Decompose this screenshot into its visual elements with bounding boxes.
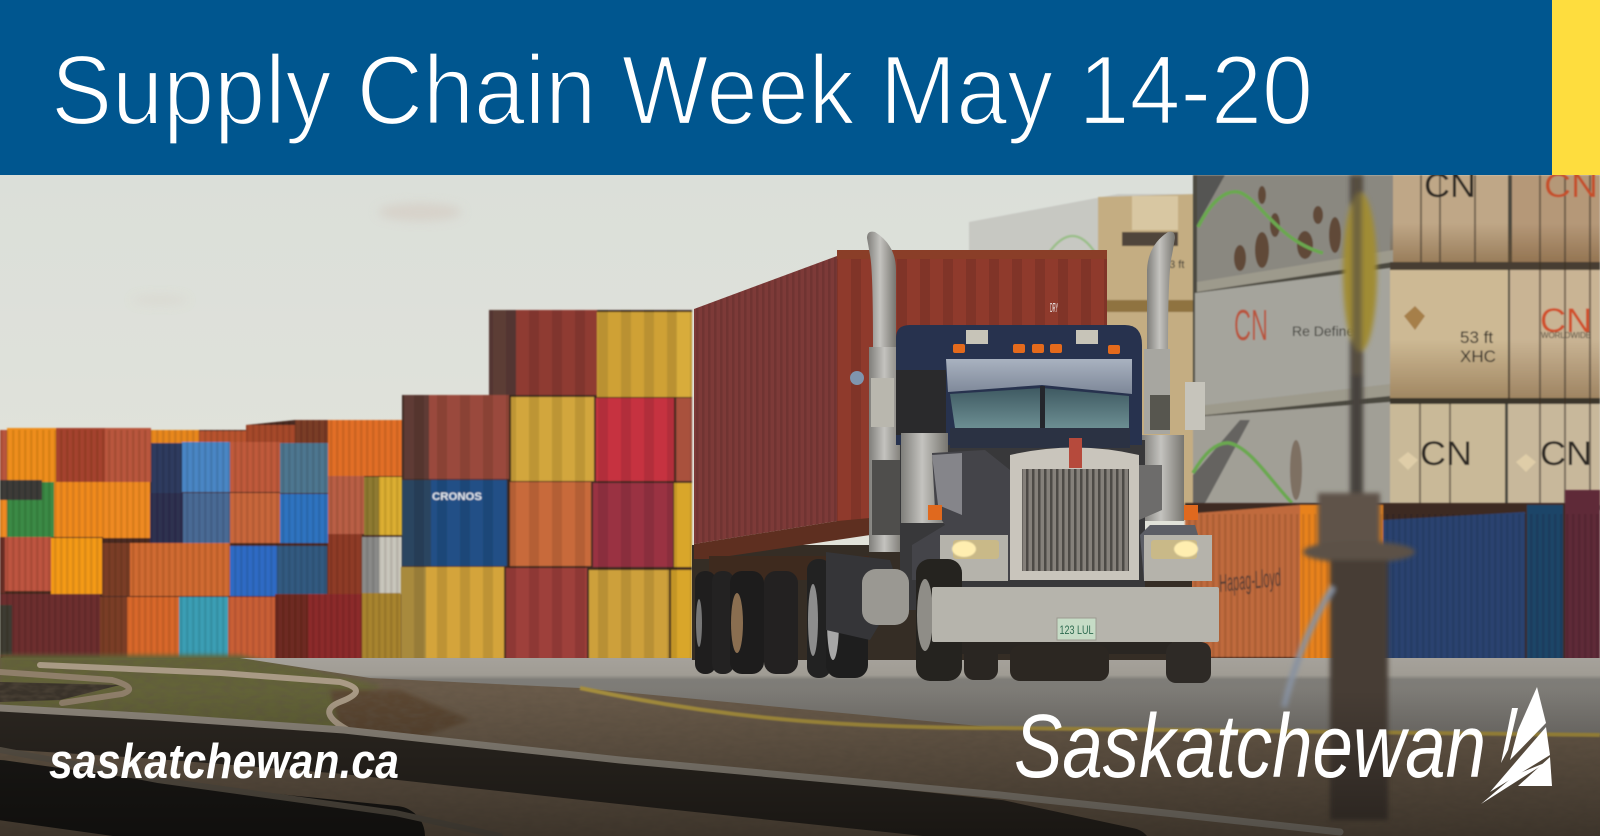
container stacks: right with CN branding: CN (1420, 435, 1472, 473)
cab (850, 325, 1205, 610)
front bumper (932, 587, 1219, 642)
headlights (940, 535, 1212, 581)
website url: saskatchewan.ca (49, 735, 399, 789)
blurred clouds (132, 203, 462, 305)
header band (0, 0, 1552, 175)
container stacks: centre (401, 310, 692, 662)
Saskatchewan wordmark: Saskatchewan (1014, 697, 1486, 797)
container stacks: behind truck (969, 194, 1198, 520)
shipping containers: lower right (1185, 490, 1600, 663)
container stacks: right with CN branding: WORLDWIDE (1541, 331, 1591, 340)
foreground pole with blurred sign (1284, 175, 1415, 820)
shipping containers: lower right: Hapag-Lloyd (1218, 564, 1283, 598)
container stacks: centre: CRONOS (432, 491, 482, 503)
trailer and drive wheels (695, 552, 900, 678)
fuel tank (862, 569, 909, 625)
container stacks: right with CN branding: CN (1544, 167, 1598, 205)
container stacks: right with CN branding: CN (1234, 301, 1268, 350)
title: Supply Chain Week May 14-20 (51, 35, 1313, 145)
trailer container (694, 250, 1107, 559)
shadow under truck (692, 545, 1192, 660)
licence plate (1057, 618, 1096, 640)
exhaust stacks (867, 232, 1184, 552)
container stacks: right with CN branding: XHC (1460, 347, 1496, 366)
container stacks: left (0, 420, 404, 662)
front tyres (916, 559, 1211, 683)
railway track (0, 665, 1340, 836)
licence plate: 123 LUL (1060, 623, 1094, 637)
icon: Saskatchewan wheat logo (1481, 687, 1552, 804)
container stacks: behind truck: 53 ft (1163, 259, 1184, 271)
ground: dirt, grass and road (0, 655, 1600, 836)
bottom photo shading (0, 690, 1600, 836)
yellow accent block (1552, 0, 1600, 175)
hood, grille and fenders (901, 433, 1212, 581)
truck with container trailer (692, 232, 1219, 683)
container stacks: right with CN branding (1193, 167, 1600, 510)
container stacks: right with CN branding: 53 ft (1460, 328, 1493, 347)
container stacks: right with CN branding: Re Defined (1292, 323, 1362, 339)
sky background (0, 175, 1600, 675)
container stacks: right with CN branding: CN (1540, 435, 1592, 473)
trailer container: DRY (1050, 300, 1058, 315)
container stacks: right with CN branding: CN (1540, 302, 1592, 340)
container stacks: right with CN branding: CN (1424, 167, 1476, 205)
